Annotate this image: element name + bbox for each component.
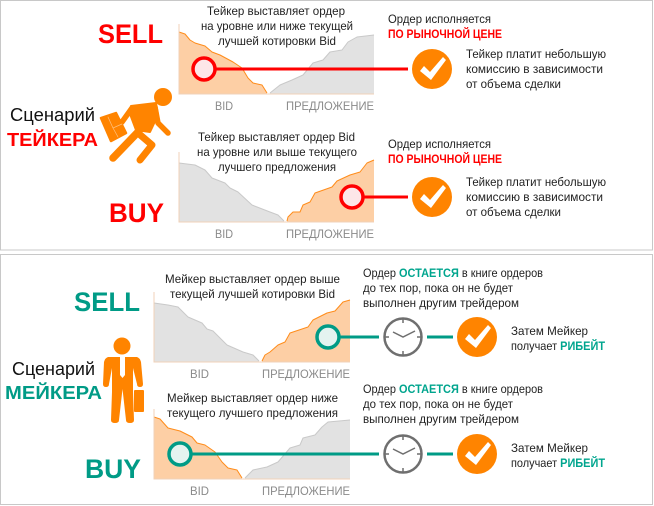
text: fee note sell: комиссию в зависимости xyxy=(466,62,603,76)
connector: buy order to check xyxy=(362,196,408,198)
text: rebate note sell: Затем Мейкер xyxy=(511,324,588,338)
text: fee note sell: Тейкер платит небольшую xyxy=(466,47,606,61)
icon: clock sell xyxy=(384,318,422,356)
panel: taker scenario xyxy=(0,0,652,250)
label: bid axis: BID xyxy=(190,484,209,498)
text: rebate note sell xyxy=(511,324,606,353)
text: fee note buy: комиссию в зависимости xyxy=(466,190,603,204)
marker: sell order xyxy=(317,326,339,348)
text: taker sell description: Тейкер выставляет ордер xyxy=(207,4,345,18)
text: market price sell: ПО РЫНОЧНОЙ ЦЕНЕ xyxy=(388,26,502,41)
text: maker buy description: Мейкер выставляет ордер ниже xyxy=(167,391,338,405)
text: taker buy description xyxy=(197,130,357,174)
icon: standing maker xyxy=(103,338,144,423)
text: taker buy description: лучшего предложения xyxy=(218,160,336,174)
icon: clock buy xyxy=(384,435,422,473)
icon: check sell xyxy=(412,49,452,89)
heading: taker scenario: ТЕЙКЕРА xyxy=(7,129,98,150)
chart: maker sell depth xyxy=(154,292,350,362)
text: fee note sell: от объема сделки xyxy=(466,77,561,91)
text: rebate note sell: получает РИБЕЙТ xyxy=(511,338,606,353)
text: maker sell description: текущей лучшей котировки Bid xyxy=(170,287,335,301)
heading: taker sell: SELL xyxy=(98,19,163,49)
text: order stays sell: до тех пор, пока он не будет xyxy=(363,281,513,295)
text: market price buy: ПО РЫНОЧНОЙ ЦЕНЕ xyxy=(388,151,502,166)
text: taker sell description: лучшей котировки Bid xyxy=(218,34,336,48)
heading: maker scenario: МЕЙКЕРА xyxy=(5,382,102,403)
text: maker sell description xyxy=(165,272,340,301)
heading: maker scenario xyxy=(5,359,102,403)
text: taker buy description: Тейкер выставляет ордер Bid xyxy=(198,130,355,144)
connector: sell order to clock xyxy=(338,336,379,338)
label: bid axis: BID xyxy=(215,99,233,113)
chart: maker buy depth xyxy=(154,409,350,479)
text: fee note buy: Тейкер платит небольшую xyxy=(466,175,606,189)
text: market price buy xyxy=(388,137,502,166)
connector: clock to check xyxy=(427,336,453,338)
heading: maker buy: BUY xyxy=(85,454,141,484)
label: bid axis: BID xyxy=(215,227,233,241)
text: order stays sell xyxy=(363,266,543,310)
text: market price sell xyxy=(388,12,502,41)
text: order stays buy: до тех пор, пока он не будет xyxy=(363,397,513,411)
label: offer axis: ПРЕДЛОЖЕНИЕ xyxy=(262,484,350,498)
text: maker sell description: Мейкер выставляет ордер выше xyxy=(165,272,340,286)
text: fee note sell xyxy=(466,47,606,91)
label: bid axis: BID xyxy=(190,367,209,381)
chart: taker sell depth xyxy=(179,24,374,94)
connector: buy order to clock xyxy=(190,452,379,456)
text: order stays sell: выполнен другим трейдером xyxy=(363,296,519,310)
heading: maker scenario: Сценарий xyxy=(12,359,95,379)
text: rebate note buy xyxy=(511,441,606,470)
connector: clock to check xyxy=(427,452,453,456)
text: taker buy description: на уровне или выше текущего xyxy=(197,145,357,159)
text: fee note buy: от объема сделки xyxy=(466,205,561,219)
text: maker buy description xyxy=(167,391,338,420)
text: order stays sell: Ордер ОСТАЕТСЯ в книге ордеров xyxy=(363,266,543,280)
marker: sell order xyxy=(193,58,215,80)
panel: maker scenario xyxy=(0,254,652,504)
text: market price sell: Ордер исполняется xyxy=(388,12,491,26)
text: maker buy description: текущего лучшего предложения xyxy=(167,406,338,420)
marker: buy order xyxy=(341,186,363,208)
label: offer axis: ПРЕДЛОЖЕНИЕ xyxy=(286,227,374,241)
heading: taker buy: BUY xyxy=(109,198,164,228)
heading: taker scenario: Сценарий xyxy=(10,105,95,125)
text: order stays buy xyxy=(363,382,543,426)
heading: taker scenario xyxy=(7,105,98,150)
text: rebate note buy: Затем Мейкер xyxy=(511,441,588,455)
icon: check buy xyxy=(412,177,452,217)
text: taker sell description: на уровне или ниже текущей xyxy=(201,19,353,33)
icon: running taker xyxy=(101,88,172,160)
text: order stays buy: Ордер ОСТАЕТСЯ в книге ордеров xyxy=(363,382,543,396)
text: market price buy: Ордер исполняется xyxy=(388,137,491,151)
label: offer axis: ПРЕДЛОЖЕНИЕ xyxy=(286,99,374,113)
marker: buy order xyxy=(169,443,191,465)
label: offer axis: ПРЕДЛОЖЕНИЕ xyxy=(262,367,350,381)
text: taker sell description xyxy=(201,4,353,48)
chart: taker buy depth xyxy=(179,152,374,222)
text: rebate note buy: получает РИБЕЙТ xyxy=(511,455,606,470)
icon: check buy xyxy=(457,434,497,474)
connector: sell order to check xyxy=(214,68,408,70)
text: order stays buy: выполнен другим трейдером xyxy=(363,412,519,426)
text: fee note buy xyxy=(466,175,606,219)
icon: check sell xyxy=(457,317,497,357)
heading: maker sell: SELL xyxy=(74,287,140,317)
